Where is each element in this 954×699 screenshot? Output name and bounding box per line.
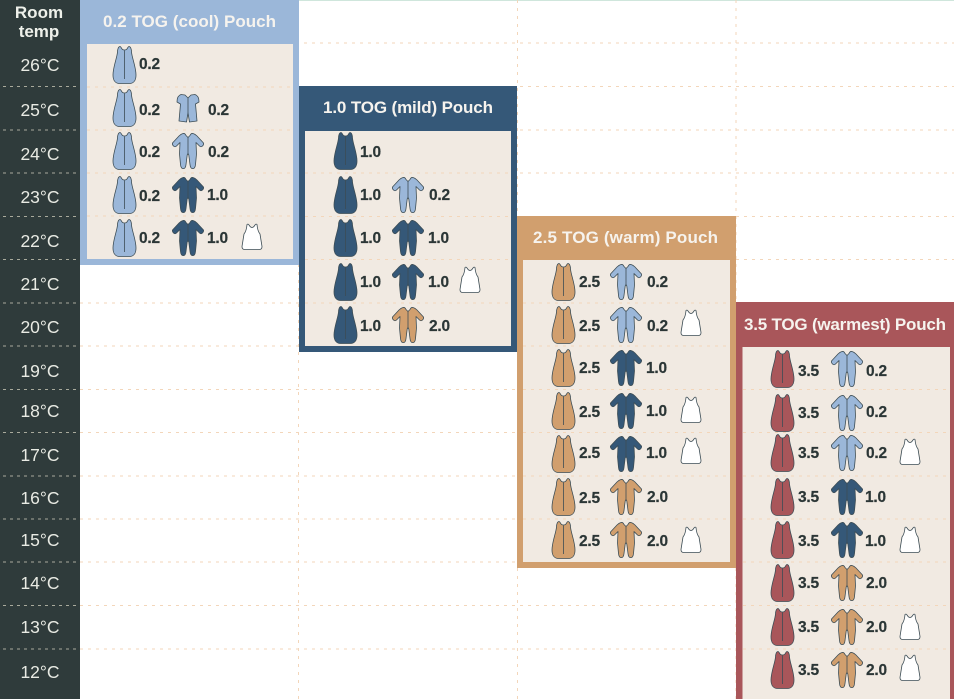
row: 21°C: 0.2 [647,274,668,291]
row: 23°C [334,220,449,256]
temperature labels [20,55,60,682]
row: 23°C: 1.0 [360,230,381,247]
row: 24°C [113,132,229,170]
temperature labels: 15°C [20,530,60,550]
heading: 3.5 TOG (warmest) Pouch [744,315,946,334]
row: 18°C [771,394,887,432]
row: 18°C: 0.2 [866,404,887,421]
row: 19°C: 3.5 [798,363,820,380]
row: 24°C: 0.2 [429,187,450,204]
row: 14°C: 2.0 [866,575,887,592]
temperature labels: 20°C [20,317,60,337]
row: 21°C: 1.0 [360,318,381,335]
temperature labels: 25°C [20,100,60,120]
row: 19°C: 1.0 [646,360,667,377]
row: 21°C: 2.5 [579,274,601,291]
row: 23°C: 0.2 [139,188,160,205]
row: 23°C: 1.0 [207,187,228,204]
row: 22°C: 1.0 [360,274,381,291]
row: 13°C: 2.0 [866,619,887,636]
row: 21°C [552,264,668,300]
row: 19°C [771,350,887,388]
temperature labels: 12°C [20,662,60,682]
row: 26°C [113,46,160,84]
row: 16°C: 1.0 [865,489,886,506]
panel: 2.5 TOG warm pouch [517,216,736,568]
temperature labels: 24°C [20,144,60,164]
row: 14°C: 3.5 [798,575,820,592]
row: 17°C [552,436,701,472]
row: 16°C: 2.0 [647,489,668,506]
row: 22°C: 1.0 [428,274,449,291]
temperature labels: 22°C [20,231,60,251]
row: 24°C: 1.0 [360,187,381,204]
row: 15°C [771,522,920,558]
heading: 0.2 TOG (cool) Pouch [103,12,276,31]
row: 21°C: 2.0 [429,318,450,335]
row: 22°C [113,220,262,256]
row: 16°C: 3.5 [798,489,820,506]
panel: 0.2 TOG cool pouch [80,0,299,265]
row: 23°C [113,176,228,214]
row: 19°C: 0.2 [866,363,887,380]
temperature labels: 16°C [20,488,60,508]
sidebar heading: temp [19,22,59,41]
row: 25°C: 0.2 [208,102,229,119]
row: 18°C: 3.5 [798,405,820,422]
temperature labels: 13°C [20,617,60,637]
temperature labels: 18°C [20,401,60,421]
panel: 3.5 TOG warmest pouch [736,302,954,699]
row: 24°C [334,176,450,214]
row: 19°C: 2.5 [579,360,601,377]
row: 18°C [552,392,701,430]
row: 25°C [113,90,229,126]
panel: 1.0 TOG mild pouch [299,86,517,352]
sidebar: room temperature scale [0,0,80,699]
temperature labels: 19°C [20,361,60,381]
row: 24°C: 0.2 [208,144,229,161]
row: 17°C: 1.0 [646,445,667,462]
row: 17°C: 2.5 [579,445,601,462]
sidebar heading: Room [15,3,63,22]
temperature labels: 21°C [20,274,60,294]
row: 20°C: 0.2 [647,318,668,335]
row: 19°C [552,350,667,386]
row: 14°C [771,564,887,602]
row: 13°C: 3.5 [798,619,820,636]
row: 13°C [771,608,920,646]
row: 22°C: 1.0 [207,230,228,247]
row: 15°C: 3.5 [798,533,820,550]
temperature labels: 14°C [20,573,60,593]
row: 15°C: 2.5 [579,533,601,550]
row: 23°C: 1.0 [428,230,449,247]
temperature labels: 17°C [20,445,60,465]
row: 20°C [552,306,701,344]
row: 15°C [552,522,701,558]
row: 18°C: 2.5 [579,404,601,421]
row: 21°C [334,306,450,344]
row: 15°C: 2.0 [647,533,668,550]
row: 25°C: 1.0 [360,144,381,161]
row: 25°C: 0.2 [139,102,160,119]
row: 15°C: 1.0 [865,533,886,550]
heading: 2.5 TOG (warm) Pouch [533,228,718,247]
row: 25°C [334,132,381,170]
row: 17°C: 3.5 [798,445,820,462]
row: 26°C: 0.2 [139,56,160,73]
row: 22°C: 0.2 [139,230,160,247]
heading: 1.0 TOG (mild) Pouch [323,98,493,117]
row: 16°C [771,478,886,516]
temperature labels: 26°C [20,55,60,75]
row: 20°C: 2.5 [579,318,601,335]
row: 12°C [771,652,920,688]
temperature labels: 23°C [20,187,60,207]
row: 17°C: 0.2 [866,445,887,462]
row: 16°C [552,478,668,516]
row: 18°C: 1.0 [646,403,667,420]
row: 16°C: 2.5 [579,490,601,507]
row: 12°C: 3.5 [798,662,820,679]
row: 12°C: 2.0 [866,662,887,679]
row: 17°C [771,434,920,472]
row: 24°C: 0.2 [139,144,160,161]
row: 22°C [334,264,480,300]
